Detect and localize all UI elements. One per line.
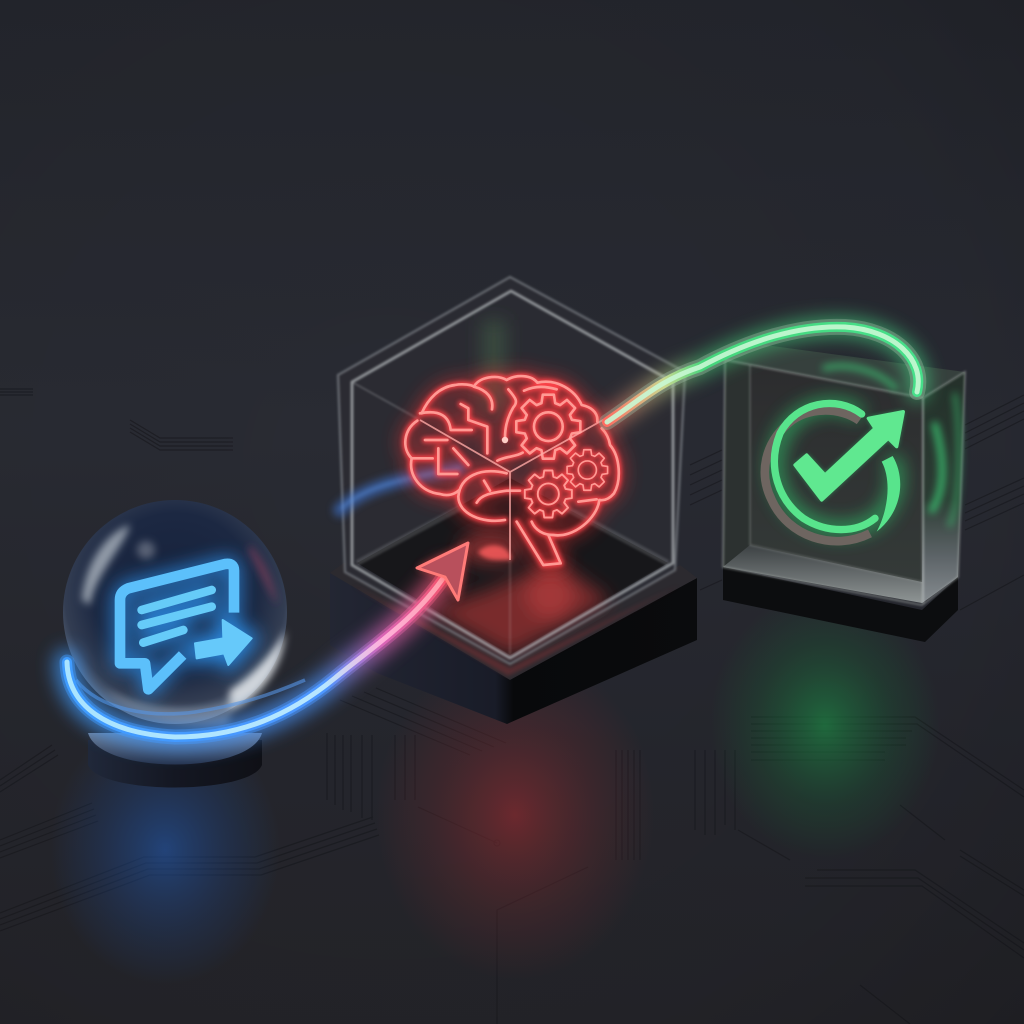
sphere base [88,733,262,788]
interior red reflections [430,320,610,655]
ring halo [775,405,896,530]
chat arrow [195,620,252,665]
green refracted glow in side and top [825,366,959,525]
green ring [774,403,875,530]
green connector tube [607,327,918,422]
icon: chat bubble with arrow [120,564,252,690]
block inner panel [750,365,922,582]
arrow head [417,543,468,600]
arrow head glow [417,543,468,600]
glass sphere [63,500,287,724]
tube glow [67,574,446,737]
sphere highlights [82,525,285,727]
tube core [67,574,446,737]
block edges [723,360,965,605]
light pool: blue reflection [50,715,280,985]
cube front edge highlights over brain [420,416,610,560]
block right side [922,372,965,603]
block glass floor [723,545,958,603]
cube base [330,562,697,724]
block base [723,567,958,642]
light pool: green reflection [710,590,940,860]
chat glow [120,564,252,690]
icon: checkmark arrow in circle [765,403,903,541]
check glow [795,412,903,500]
tube glass sleeve [67,574,446,737]
cube glass body [338,277,685,664]
back loop of tube [76,680,305,714]
floor circuit pattern [0,389,1024,1024]
cube glass edges [338,277,685,664]
chat bubble outline [120,564,234,689]
green crescent [877,456,900,532]
tube body [67,574,446,737]
AI processing cube [330,277,697,724]
grey ring [765,410,870,541]
block glass front [723,360,923,603]
verified output block [723,345,965,642]
cube interior floor [357,478,668,655]
check arrow [795,412,903,500]
light pool: red reflection [375,650,655,980]
faint blue light trail inside cube [340,468,460,510]
blue to red flow arrow [67,543,468,737]
chat text lines [142,590,212,643]
block top face [725,345,965,398]
input sphere [63,500,287,788]
interior bright reflection spot [478,545,512,560]
icon: neon brain with gears [405,376,619,565]
